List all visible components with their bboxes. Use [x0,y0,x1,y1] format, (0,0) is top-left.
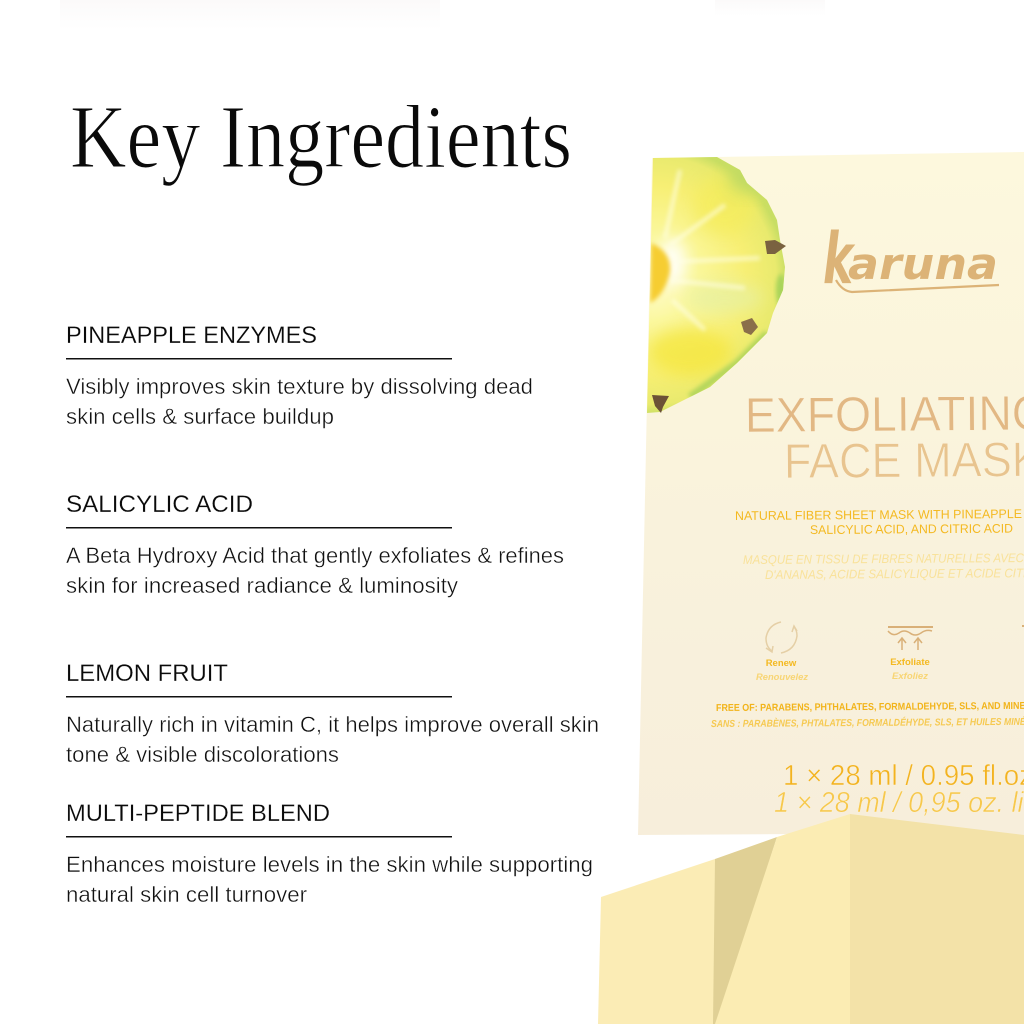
icon: exfoliate: Exfoliate [890,657,930,668]
product package [638,152,1024,840]
ingredient: salicylic acid: SALICYLIC ACID [66,491,253,518]
brand logo [823,218,999,300]
ingredient: lemon fruit: LEMON FRUIT [66,660,228,687]
icon: renew: Renouvelez [756,672,808,683]
ingredient: lemon fruit [66,660,599,767]
icon: renew: Renew [766,658,797,669]
ingredient: pineapple enzymes: PINEAPPLE ENZYMES [66,322,317,349]
ingredient: lemon fruit: Naturally rich in vitamin C, it helps improve overall skin [66,712,599,737]
ingredient: salicylic acid [66,491,564,598]
ingredient: lemon fruit: tone & visible discolorations [66,742,339,767]
free-of statement [711,701,1024,730]
product description: NATURAL FIBER SHEET MASK WITH PINEAPPLE [735,507,1022,523]
ingredient: salicylic acid: skin for increased radiance & luminosity [66,573,458,598]
net weight [774,760,1024,819]
brand logo: k [823,218,856,300]
icon: third benefit, cropped at edge [1022,625,1024,627]
pineapple slice illustration [647,157,786,413]
product description [735,507,1024,582]
display pedestal [598,814,1024,1024]
icon: renew [756,622,808,683]
product description: SALICYLIC ACID, AND CITRIC ACID [810,522,1013,537]
package sheet [638,152,1024,840]
ingredient: multi-peptide blend: Enhances moisture levels in the skin while supporting [66,852,593,877]
brand logo: aruna [848,239,998,290]
ingredient: salicylic acid: A Beta Hydroxy Acid that gently exfoliates & refines [66,543,564,568]
icon: exfoliate [888,626,933,682]
ingredient: pineapple enzymes: skin cells & surface buildup [66,404,334,429]
ingredient: multi-peptide blend: MULTI-PEPTIDE BLEND [66,800,330,827]
ingredient: multi-peptide blend [66,800,593,907]
product name [745,387,1024,489]
ingredient: pineapple enzymes [66,322,533,429]
icon: exfoliate: Exfoliez [892,671,928,682]
ingredient: multi-peptide blend: natural skin cell turnover [66,882,307,907]
ingredient: pineapple enzymes: Visibly improves skin texture by dissolving dead [66,374,533,399]
title: Key Ingredients [70,88,572,187]
